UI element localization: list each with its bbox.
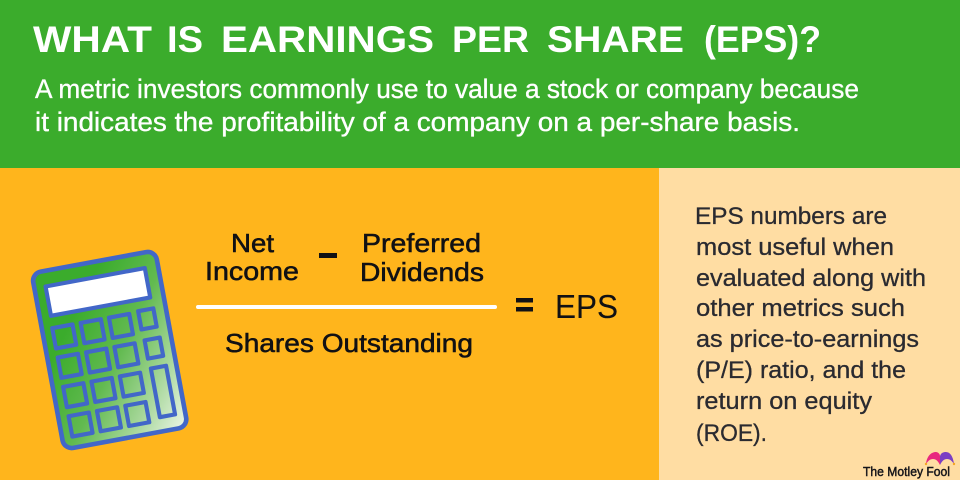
subtitle: A metric investors commonly use to value a stock or company because	[35, 74, 859, 104]
title: IS	[167, 18, 203, 60]
wordmark: The Motley Fool	[863, 464, 950, 479]
equals sign	[516, 298, 533, 312]
title: EARNINGS	[221, 18, 434, 60]
minus sign	[319, 253, 337, 258]
formula	[196, 228, 618, 358]
numerator: preferred dividends	[360, 228, 484, 287]
sidebar text: return on equity	[696, 388, 873, 415]
sidebar text	[695, 203, 926, 447]
sidebar text: most useful when	[696, 234, 894, 261]
numerator: net income: Income	[205, 256, 299, 286]
numerator: net income	[205, 228, 299, 286]
icon: jester hat	[925, 452, 955, 465]
denominator: Shares Outstanding	[225, 328, 473, 358]
sidebar text: (ROE).	[696, 420, 767, 447]
title: PER	[452, 18, 529, 60]
sidebar text: evaluated along with	[696, 265, 926, 292]
title: (EPS)?	[704, 18, 821, 60]
title: WHAT	[33, 18, 152, 60]
icon: calculator	[32, 250, 188, 450]
sidebar text: (P/E) ratio, and the	[696, 357, 906, 384]
subtitle: it indicates the profitability of a company on a per-share basis.	[35, 107, 800, 137]
sidebar text: other metrics such	[696, 295, 905, 322]
title	[33, 18, 821, 60]
panel: orange formula area	[0, 168, 659, 480]
numerator: preferred dividends: Preferred	[362, 228, 481, 258]
numerator: net income: Net	[231, 228, 275, 258]
sidebar text: as price-to-earnings	[696, 326, 919, 353]
EPS result: EPS	[555, 288, 618, 325]
numerator: preferred dividends: Dividends	[360, 257, 484, 287]
panel: cream sidebar	[659, 168, 960, 480]
title: SHARE	[547, 18, 684, 60]
sidebar text: EPS numbers are	[695, 203, 887, 230]
subtitle	[35, 74, 859, 137]
logo: The Motley Fool	[863, 452, 955, 479]
panel: green header	[0, 0, 960, 168]
fraction bar	[196, 305, 497, 309]
